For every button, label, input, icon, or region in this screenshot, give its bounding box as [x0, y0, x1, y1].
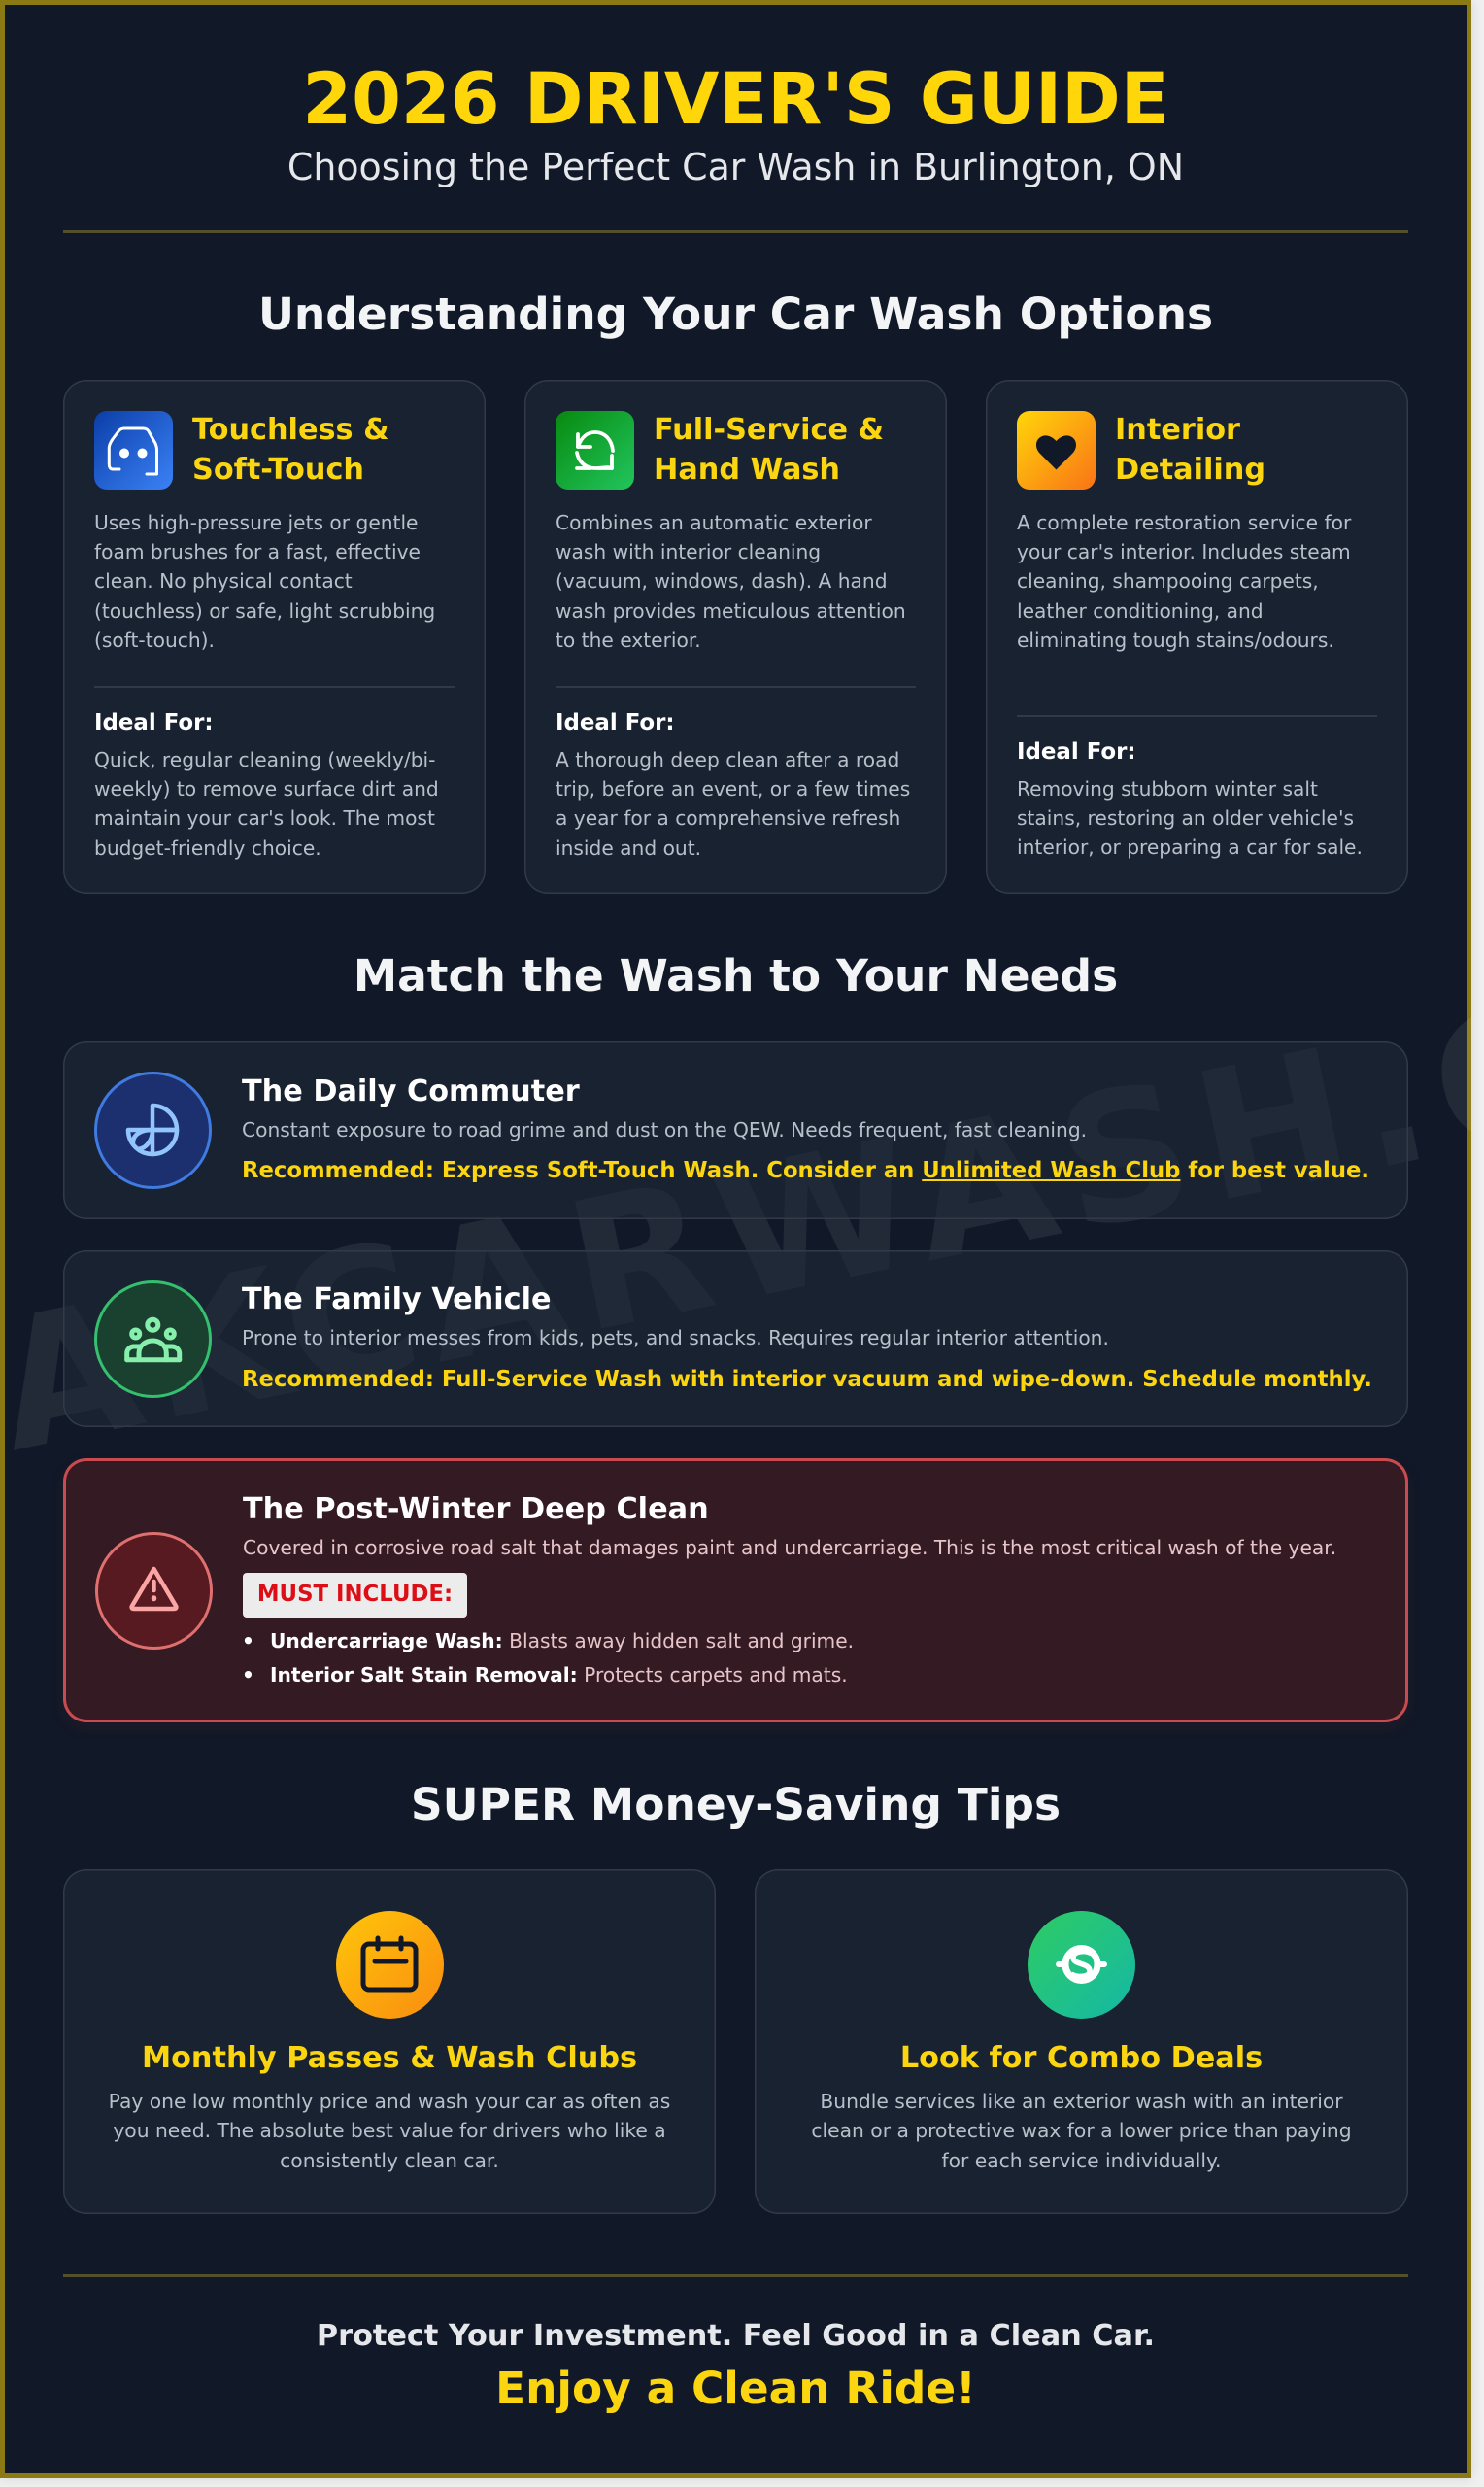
panel: family vehicle — [63, 1250, 1408, 1427]
description: clean. No physical contact — [94, 569, 353, 593]
list item: undercarriage: • — [242, 1629, 254, 1652]
tip text: clean or a protective wax for a lower price than paying — [811, 2119, 1352, 2142]
icon: savings symbol — [1028, 1911, 1135, 2019]
ideal for text — [556, 748, 910, 860]
panel: combo deals — [755, 1869, 1408, 2214]
card title: Touchless & — [192, 413, 389, 447]
description: wash with interior cleaning — [556, 540, 821, 563]
subtitle: Choosing the Perfect Car Wash in Burlington, ON — [287, 146, 1184, 188]
description: to the exterior. — [556, 629, 701, 652]
ideal for label: Ideal For: — [1017, 739, 1136, 765]
icon: warning triangle in circle — [95, 1532, 213, 1650]
tip text — [109, 2090, 670, 2172]
badge: must include: MUST INCLUDE: — [257, 1582, 453, 1607]
description: leather conditioning, and — [1017, 599, 1264, 623]
persona title: The Post-Winter Deep Clean — [243, 1492, 709, 1526]
ideal for text: weekly) to remove surface dirt and — [94, 777, 439, 801]
ideal for label: Ideal For: — [556, 710, 675, 735]
recommendation: Recommended: Full-Service Wash with interior vacuum and wipe-down. Schedule monthly. — [242, 1367, 1372, 1392]
ideal for text: budget-friendly choice. — [94, 836, 321, 860]
persona description: Constant exposure to road grime and dust on the QEW. Needs frequent, fast cleaning. — [242, 1118, 1087, 1141]
description — [556, 511, 906, 652]
list: must include items — [242, 1629, 854, 1686]
persona description: Covered in corrosive road salt that damages paint and undercarriage. This is the most critical wash of the year. — [243, 1536, 1336, 1559]
ideal for text: A thorough deep clean after a road — [556, 748, 899, 771]
tip text — [811, 2090, 1352, 2172]
description: Combines an automatic exterior — [556, 511, 872, 534]
heading: car wash options: Understanding Your Car Wash Options — [258, 289, 1213, 340]
list: must include items: • — [242, 1663, 254, 1686]
panel: full-service and hand wash — [524, 380, 947, 894]
ideal for text: trip, before an event, or a few times — [556, 777, 910, 801]
description — [94, 511, 435, 652]
panel: post-winter deep clean — [63, 1458, 1408, 1722]
ideal for text: inside and out. — [556, 836, 701, 860]
list item: undercarriage — [242, 1629, 854, 1652]
card title: Detailing — [1115, 453, 1265, 487]
persona description: Prone to interior messes from kids, pets, and snacks. Requires regular interior attention. — [242, 1326, 1109, 1349]
icon: heart — [1017, 411, 1096, 490]
list: must include items: Undercarriage Wash: Blasts away hidden salt and grime. — [270, 1629, 854, 1652]
ideal for text: stains, restoring an older vehicle's — [1017, 806, 1354, 830]
panel: daily commuter — [63, 1041, 1408, 1219]
panel: interior detailing — [986, 380, 1408, 894]
card title: Full-Service & — [654, 413, 884, 447]
description: eliminating tough stains/odours. — [1017, 629, 1334, 652]
icon: refresh arrows — [556, 411, 634, 490]
icon: group of people in circle — [94, 1280, 212, 1398]
tip text: for each service individually. — [942, 2149, 1221, 2172]
ideal for text: Quick, regular cleaning (weekly/bi- — [94, 748, 435, 771]
ideal for text — [94, 748, 439, 860]
card title: Interior — [1115, 413, 1240, 447]
tip text: Bundle services like an exterior wash with an interior — [820, 2090, 1343, 2113]
description: Uses high-pressure jets or gentle — [94, 511, 418, 534]
description: A complete restoration service for — [1017, 511, 1351, 534]
persona title: The Family Vehicle — [242, 1282, 552, 1316]
panel: monthly passes — [63, 1869, 716, 2214]
description: your car's interior. Includes steam — [1017, 540, 1351, 563]
icon: calendar — [336, 1911, 444, 2019]
footer tagline: Protect Your Investment. Feel Good in a Clean Car. — [317, 2319, 1155, 2353]
tip text: you need. The absolute best value for drivers who like a — [113, 2119, 666, 2142]
footer call to action: Enjoy a Clean Ride! — [495, 2363, 976, 2414]
tip text: consistently clean car. — [280, 2149, 499, 2172]
description: (soft-touch). — [94, 629, 215, 652]
icon: chart pie in circle — [94, 1072, 212, 1189]
tip text: Pay one low monthly price and wash your car as often as — [109, 2090, 670, 2113]
ideal for text: interior, or preparing a car for sale. — [1017, 835, 1363, 859]
ideal for label: Ideal For: — [94, 710, 214, 735]
title: 2026 DRIVER'S GUIDE — [302, 58, 1169, 141]
list item: salt stain removal: Interior Salt Stain Removal: Protects carpets and mats. — [270, 1663, 848, 1686]
card title — [654, 413, 884, 487]
persona title: The Daily Commuter — [242, 1074, 580, 1108]
recommendation: Recommended: Express Soft-Touch Wash. Consider an Unlimited Wash Club for best value. — [242, 1158, 1369, 1183]
icon: car — [94, 411, 173, 490]
heading: money-saving tips: SUPER Money-Saving Tips — [411, 1779, 1061, 1830]
description: (vacuum, windows, dash). A hand — [556, 569, 888, 593]
description — [1017, 511, 1352, 652]
heading: match the wash: Match the Wash to Your Needs — [354, 950, 1118, 1002]
tip title: Monthly Passes & Wash Clubs — [142, 2041, 637, 2075]
description: (touchless) or safe, light scrubbing — [94, 599, 435, 623]
card title — [192, 413, 389, 487]
description: cleaning, shampooing carpets, — [1017, 569, 1319, 593]
tip title: Look for Combo Deals — [900, 2041, 1263, 2075]
description: foam brushes for a fast, effective — [94, 540, 421, 563]
ideal for text: a year for a comprehensive refresh — [556, 806, 900, 830]
ideal for text: maintain your car's look. The most — [94, 806, 435, 830]
card title: Soft-Touch — [192, 453, 364, 487]
badge: must include — [243, 1573, 467, 1618]
description: wash provides meticulous attention — [556, 599, 906, 623]
panel: touchless and soft-touch — [63, 380, 486, 894]
card title — [1115, 413, 1265, 487]
card title: Hand Wash — [654, 453, 840, 487]
ideal for text — [1017, 777, 1363, 859]
ideal for text: Removing stubborn winter salt — [1017, 777, 1318, 801]
